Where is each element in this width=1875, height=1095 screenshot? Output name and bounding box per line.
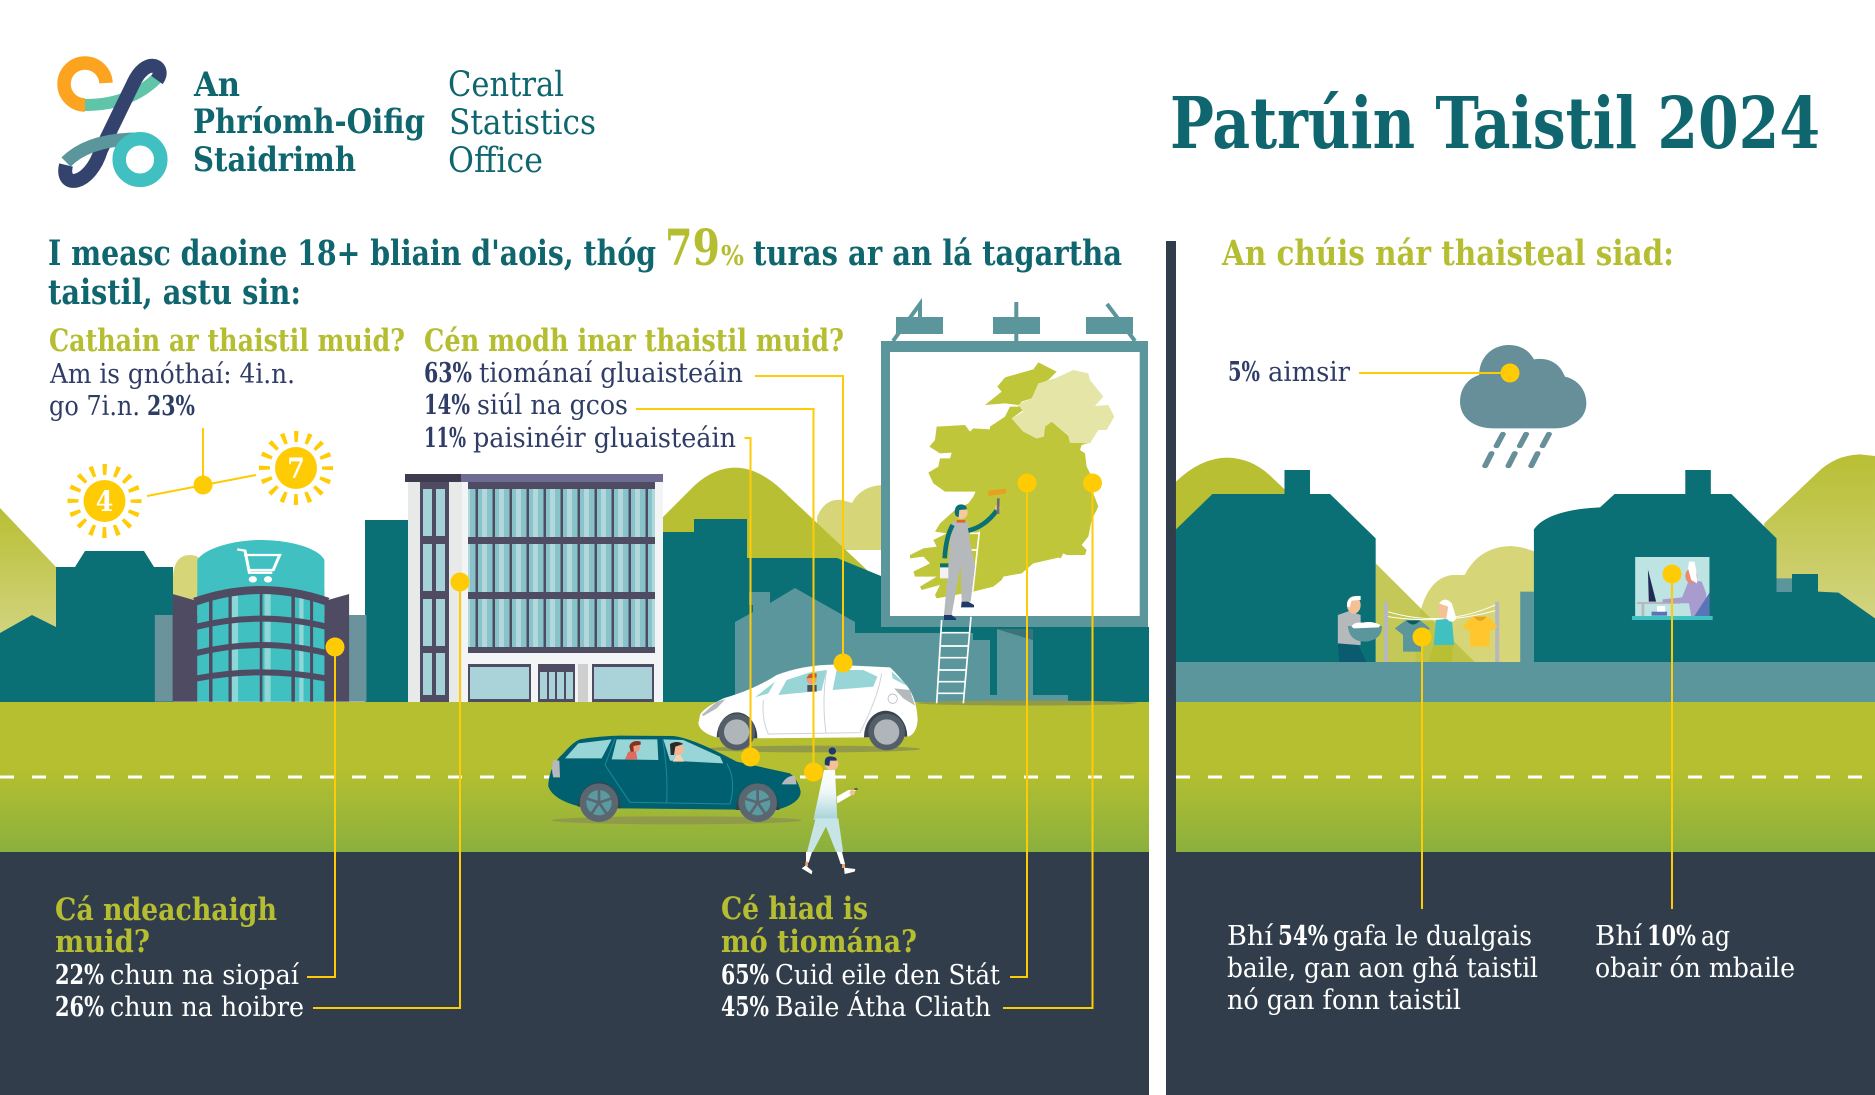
text block: where we went: 26% xyxy=(55,992,104,1023)
logo text: Irish: Phríomh-Oifig xyxy=(193,102,425,142)
text block: who drives most: Cuid eile den Stát xyxy=(775,960,1000,991)
text block: working from home: ag xyxy=(1701,921,1730,952)
heading: why they did not travel: An chúis nár thaisteal siad: xyxy=(1221,233,1674,274)
text block: when we travelled xyxy=(49,323,405,422)
text block: mode of travel: 63% xyxy=(424,358,472,389)
woman feet over band xyxy=(802,852,855,874)
painter on ladder xyxy=(937,489,1006,703)
text block: where we went: muid? xyxy=(55,924,150,960)
logo text: Irish: An xyxy=(193,65,240,105)
text block: mode of travel: paisinéir gluaisteáin xyxy=(473,423,736,454)
heading: main statement: turas ar an lá tagartha xyxy=(753,233,1122,274)
panel: right scene xyxy=(1176,345,1875,852)
label: weather: 5% xyxy=(1228,357,1260,388)
text block: who drives most: 65% xyxy=(721,960,769,991)
label: weather: aimsir xyxy=(1268,357,1350,388)
text block: where we went: 22% xyxy=(55,960,104,991)
woman walking xyxy=(807,747,858,853)
ladder xyxy=(937,532,979,703)
text block: where we went: chun na siopaí xyxy=(110,960,299,991)
text block: mode of travel: tiománaí gluaisteáin xyxy=(479,358,743,389)
billboard xyxy=(881,302,1148,627)
text block: who drives most: Baile Átha Cliath xyxy=(775,990,991,1023)
wheels xyxy=(578,782,779,822)
icon: sun 7 pm xyxy=(264,436,328,500)
road markings xyxy=(0,776,1149,778)
text block: who drives most: mó tiomána? xyxy=(721,924,917,960)
text block: when we travelled: Am is gnóthaí: 4i.n. xyxy=(49,359,295,390)
logo text: English xyxy=(448,65,596,181)
logo text: Irish: Staidrimh xyxy=(193,140,356,180)
text block: working from home: 10% xyxy=(1647,921,1696,952)
text block: where we went: chun na hoibre xyxy=(110,992,304,1023)
logo text: English: Office xyxy=(448,141,543,181)
logo xyxy=(64,63,596,181)
icon: rain cloud xyxy=(1460,345,1586,466)
text block: working from home: obair ón mbaile xyxy=(1595,953,1795,984)
text block: mode of travel: siúl na gcos xyxy=(477,390,628,421)
Northern Ireland xyxy=(1012,370,1114,443)
text block: household duties: 54% xyxy=(1278,921,1328,952)
road markings right xyxy=(1176,776,1875,778)
text block: mode of travel: 14% xyxy=(424,390,470,421)
text block: when we travelled: Cathain ar thaistil muid? xyxy=(49,323,405,359)
text block: when we travelled: go 7i.n. xyxy=(49,391,140,422)
window with home worker xyxy=(1632,557,1713,620)
dark footer band left xyxy=(0,852,1149,1095)
text block: mode of travel: Cén modh inar thaistil muid? xyxy=(424,323,844,359)
text block: where we went: Cá ndeachaigh xyxy=(55,892,277,928)
text block: household duties: nó gan fonn taistil xyxy=(1227,985,1461,1016)
landscape background right xyxy=(1176,454,1875,702)
text block: who drives most: Cé hiad is xyxy=(721,891,868,927)
dark footer band right xyxy=(1176,852,1875,1095)
Republic of Ireland xyxy=(910,362,1098,598)
people hanging laundry xyxy=(1338,596,1499,662)
icon: sun 4 am: 4 xyxy=(96,485,113,518)
icon: sun 7 pm: 7 xyxy=(287,452,305,485)
text block: household duties xyxy=(1227,921,1538,1016)
heading: main statement: I measc daoine 18+ bliain d'aois, thóg xyxy=(48,233,656,274)
panel: left scene xyxy=(0,302,1149,853)
billboard shadow xyxy=(917,700,1137,706)
text block: where we went xyxy=(55,892,304,1023)
text block: mode of travel xyxy=(424,323,844,454)
logo text: Irish xyxy=(193,65,425,180)
icon: sun 4 am xyxy=(73,470,136,532)
text block: household duties: Bhí xyxy=(1227,921,1273,952)
teal car xyxy=(548,736,802,824)
yellow marker dots xyxy=(194,364,1682,782)
icon: shopping cart xyxy=(237,549,280,581)
heading: main statement xyxy=(48,218,1122,313)
ground left xyxy=(0,702,1149,852)
logo text: English: Statistics xyxy=(449,103,596,143)
text block: working from home: Bhí xyxy=(1595,921,1642,952)
text block: working from home xyxy=(1595,921,1795,984)
shopping centre xyxy=(155,540,366,702)
heading: main statement: taistil, astu sin: xyxy=(48,272,301,313)
text block: when we travelled: 23% xyxy=(147,391,195,422)
text block: mode of travel: 11% xyxy=(424,423,466,454)
text block: who drives most xyxy=(721,891,1000,1023)
office building xyxy=(405,474,663,702)
white car xyxy=(698,665,921,752)
text block: who drives most: 45% xyxy=(721,992,769,1023)
heading: main statement: % xyxy=(721,241,744,272)
text block: household duties: gafa le dualgais xyxy=(1333,921,1532,952)
label: weather xyxy=(1228,357,1350,388)
logo mark xyxy=(64,63,161,181)
heading: main statement: 79 xyxy=(665,218,720,277)
logo text: English: Central xyxy=(448,65,564,105)
landscape background left xyxy=(0,468,1149,702)
map of Ireland xyxy=(910,362,1114,598)
title: Patrúin Taistil 2024 xyxy=(1170,81,1820,165)
wheels xyxy=(717,711,907,750)
text block: household duties: baile, gan aon ghá taistil xyxy=(1227,953,1538,984)
ground right xyxy=(1176,702,1875,852)
yellow leader lines xyxy=(147,373,1672,1008)
panel: right divider xyxy=(1166,241,1176,1095)
